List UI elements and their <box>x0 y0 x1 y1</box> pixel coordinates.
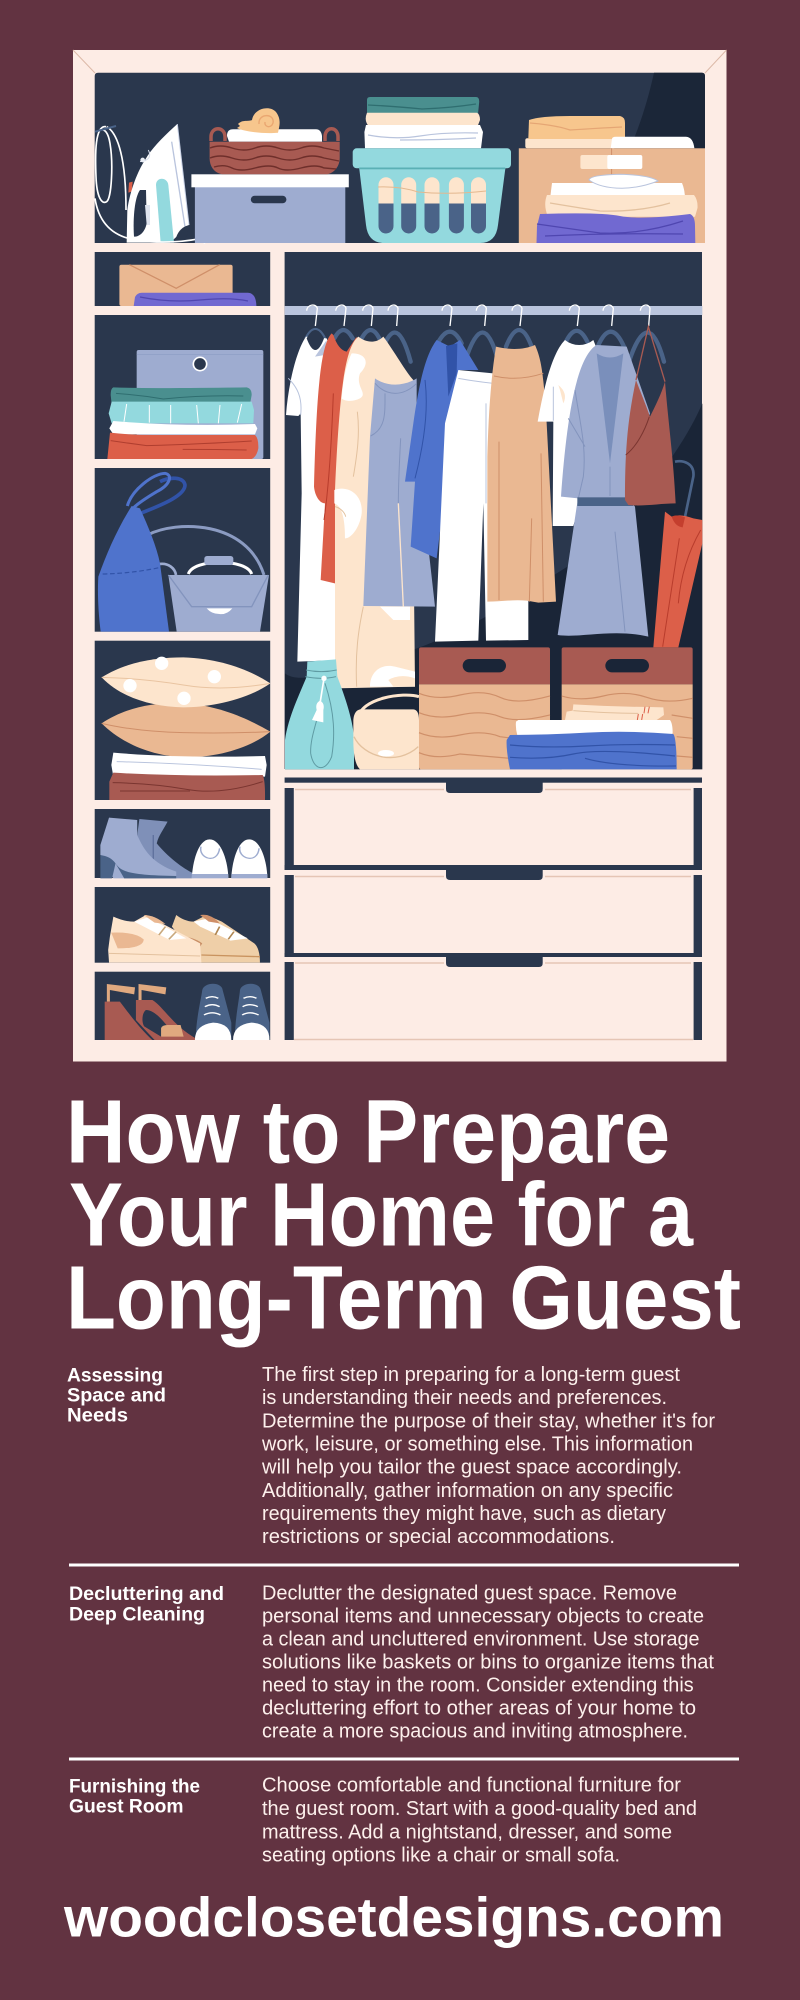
wardrobe frame <box>73 50 726 1062</box>
lavender robe <box>558 345 650 637</box>
brown camisole <box>625 327 676 505</box>
wicker basket with towel <box>210 108 340 174</box>
red garment <box>314 333 357 585</box>
clothes rail <box>285 306 702 315</box>
section text: Declutter the designated guest space. Remove <box>262 1582 677 1604</box>
shelf 4: pillows and folded stack <box>95 641 270 800</box>
section text: solutions like baskets or bins to organize items that <box>262 1652 714 1674</box>
icon: iron and cord <box>95 124 218 244</box>
section text: will help you tailor the guest space accordingly. <box>261 1457 682 1479</box>
section heading <box>69 1776 200 1818</box>
lavender dress <box>363 378 435 607</box>
section text: the guest room. Start with a good-quality bed and <box>262 1798 697 1820</box>
section text: seating options like a chair or small sofa. <box>262 1845 620 1867</box>
section text: a clean and uncluttered environment. Use storage <box>262 1628 700 1650</box>
white t-shirt dress <box>286 337 347 662</box>
shelf 3: bags <box>95 468 270 632</box>
website url: woodclosetdesigns.com <box>63 1886 724 1949</box>
section text: is understanding their needs and preferences. <box>262 1387 667 1409</box>
section text: work, leisure, or something else. This information <box>261 1434 693 1456</box>
section heading: Deep Cleaning <box>69 1605 205 1626</box>
hangers <box>307 305 664 362</box>
storage box with lid <box>191 174 349 243</box>
section: Furnishing the Guest Room <box>69 1775 697 1867</box>
wooden crate left <box>419 647 550 769</box>
drawer 1 <box>285 782 702 870</box>
section text: mattress. Add a nightstand, dresser, and some <box>262 1821 672 1843</box>
shelf 5: boots and white shoes <box>95 809 270 878</box>
teal drawstring bag <box>285 659 354 769</box>
folded stack on laundry basket <box>364 97 483 148</box>
section text: The first step in preparing for a long-term guest <box>262 1364 680 1386</box>
white t-shirt <box>538 340 613 526</box>
section text <box>262 1582 714 1743</box>
wooden crate right <box>562 647 693 769</box>
shelf 1: envelope box <box>95 252 270 306</box>
section text: personal items and unnecessary objects to create <box>262 1606 704 1628</box>
illustration: wardrobe <box>73 50 726 1062</box>
shelf 2: box and folded stack <box>95 315 270 459</box>
section text: Additionally, gather information on any specific <box>262 1480 673 1502</box>
shelf 7: heels and high-top sneakers <box>95 972 270 1040</box>
section text: Determine the purpose of their stay, whether it's for <box>262 1410 715 1432</box>
cream handbag <box>353 695 419 769</box>
white trousers <box>435 370 528 642</box>
section text <box>261 1364 715 1548</box>
umbrella <box>653 461 702 647</box>
section heading: Furnishing the <box>69 1776 200 1797</box>
section: Assessing Space and Needs <box>67 1364 715 1548</box>
panel: left shelves <box>95 252 270 1040</box>
title: Your Home for a <box>69 1166 694 1266</box>
section heading: Assessing <box>67 1366 163 1387</box>
section text: restrictions or special accommodations. <box>262 1526 615 1548</box>
section heading <box>69 1584 224 1626</box>
section text: Choose comfortable and functional furniture for <box>262 1775 681 1797</box>
drawer 2 <box>285 870 702 957</box>
cream patterned dress <box>334 337 415 688</box>
blue jacket <box>405 340 478 558</box>
section heading: Guest Room <box>69 1797 184 1818</box>
section heading: Space and <box>67 1386 166 1407</box>
title: Long-Term Guest <box>66 1248 741 1348</box>
section: Decluttering and Deep Cleaning <box>69 1582 714 1743</box>
panel: drawers <box>285 778 702 1040</box>
section text: requirements they might have, such as dietary <box>262 1503 666 1525</box>
folded clothes in front of crates <box>507 704 677 769</box>
section text: need to stay in the room. Consider extending this <box>262 1674 694 1696</box>
cardboard box with folded clothes <box>519 116 705 243</box>
title: How to Prepare <box>66 1083 670 1183</box>
section heading: Decluttering and <box>69 1584 224 1605</box>
panel: hanging clothes <box>285 252 702 769</box>
section text: decluttering effort to other areas of your home to <box>262 1698 696 1720</box>
drawer 3 <box>285 956 702 1040</box>
shelf 6: sneakers <box>95 887 270 963</box>
section heading: Needs <box>67 1406 128 1427</box>
section text <box>262 1775 697 1867</box>
title <box>66 1083 741 1348</box>
section heading <box>67 1366 166 1427</box>
section text: create a more spacious and inviting atmosphere. <box>262 1721 688 1743</box>
peach dress <box>487 345 556 603</box>
laundry basket <box>353 148 511 243</box>
panel: top shelf <box>95 73 705 244</box>
